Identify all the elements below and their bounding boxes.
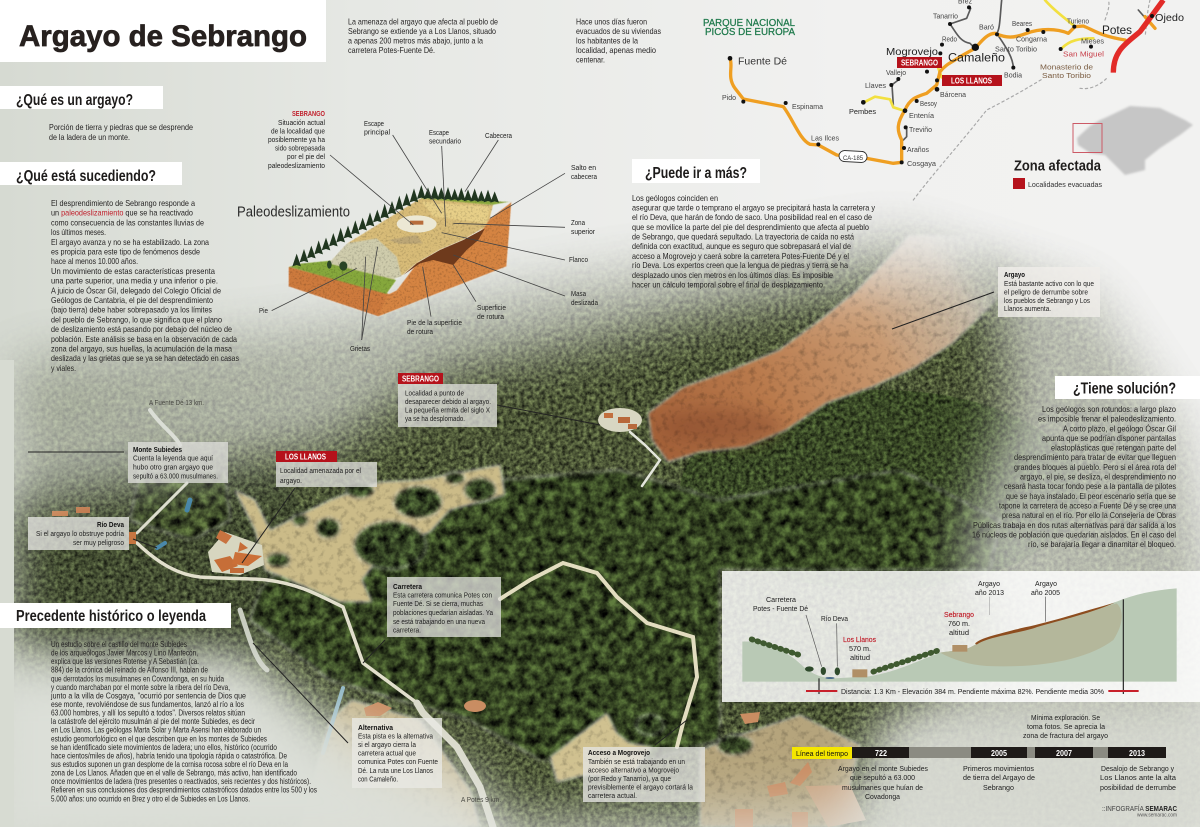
map: place names: Espinama: [792, 102, 824, 111]
panel: terrain profile: Argayo: [1035, 579, 1057, 588]
text: is there a solution: Públicas trabaja en dos rutas alternativas para dar salida a los: [973, 520, 1176, 530]
map: place names: Besoy: [920, 99, 937, 108]
map: place names: Mogrovejo: [886, 46, 938, 58]
text: definition of argayo: Porción de tierra y piedras que se desprende: [49, 122, 193, 132]
map: place names: Congarna: [1016, 34, 1048, 44]
text: historical precedent: se han identificado siete movimientos de ladera; uno ellos, histórico (ocurrido: [51, 743, 278, 752]
text: can it go further: río Deva. Los expertos creen que la lengua de piedras y tierra se ha: [632, 260, 848, 270]
map label: Los Llanos: [942, 75, 1002, 86]
panel: terrain profile: Carretera: [766, 595, 797, 604]
forest clumps on the meadows: [266, 472, 753, 755]
text: what is happening: es propicia para este tipo de fenómenos desde: [51, 246, 200, 256]
panel: terrain profile: año 2005: [1031, 588, 1060, 597]
panel: terrain profile: [722, 571, 1200, 702]
roads and tracks: [137, 410, 697, 827]
forest: distant canopy: [0, 207, 1200, 827]
map: place names: Entenía: [909, 111, 935, 120]
text: historical precedent: [50, 640, 317, 803]
intro text block 1: La amenaza del argayo que afecta al pueblo de: [348, 16, 498, 26]
intro text block 1: [348, 16, 498, 55]
diagram labels: Pie: [259, 306, 268, 315]
text: can it go further: definida con exactitud, aunque es seguro que sobrepasará el vial de: [632, 241, 851, 251]
text: can it go further: hacer un cálculo temporal sobre el final de desplazamiento.: [632, 280, 825, 290]
callout: Monte Subiedes: [28, 442, 228, 483]
callout: Argayo: el peligro de derrumbe sobre: [1004, 288, 1088, 296]
text: definition of argayo: de la ladera de un monte.: [49, 132, 130, 142]
text: what is happening: hace al menos 10.000 años.: [51, 256, 138, 266]
forest: foreground canopy: [130, 470, 1000, 760]
text: what is happening: deslizada y las grietas que se ya se han detectado en casas: [51, 353, 239, 363]
text: historical precedent: ese monte, revolviéndose de sus fundamentos, lanzó al río a los: [51, 700, 244, 709]
map: place names: Potes: [1102, 23, 1132, 37]
panel: terrain profile: altitud: [949, 628, 969, 637]
callout: Acceso a Mogrovejo: (por Redo y Tanarrio), ya que: [588, 774, 671, 783]
intro text block 1: Sebrango se extiende ya a Los Llanos, situado: [348, 26, 496, 36]
callout: Los Llanos: argayo.: [280, 476, 302, 485]
text: can it go further: asegurar que tarde o temprano el argayo se precipitará hasta la carretera y: [632, 202, 876, 212]
text: historical precedent: 5.000 años: uno ocurrido en Brez y otro el de Subiedes en Los Llanos.: [51, 794, 250, 803]
map: place names: Llaves: [865, 81, 886, 90]
map: place names: Pembes: [849, 107, 876, 116]
callout: Carretera: [363, 577, 501, 663]
text: what is happening: (bajo tierra) debe haber sobrepasado ya los límites: [51, 305, 212, 315]
map: place names: Tanarrio: [933, 12, 958, 20]
text: historical precedent: hace cientos/miles de años), habría tenido una tipología rápida o catastrófica. De: [51, 751, 287, 760]
map: place names: Camaleño: [948, 50, 1005, 64]
heading: ¿Qué está sucediendo?: [0, 162, 182, 185]
map: place names: Ojedo: [1155, 13, 1184, 24]
diagram labels: de rotura: [407, 327, 434, 336]
text: what is happening: Geólogos de Cantabria, el pie del desprendimiento: [51, 295, 213, 305]
text: historical precedent: la catástrofe del ejército musulmán al pie del monte Subiedes, es decir: [51, 717, 255, 726]
timeline: 722 note: Argayo en el monte Subiedes: [838, 764, 928, 773]
rupture surface: [403, 228, 485, 275]
callout: Sebrango: Localidad a punto de: [405, 388, 464, 398]
callout: Alternativa: Esta pista es la alternativa: [358, 732, 434, 740]
map: place names: Fuente Dé: [738, 56, 787, 68]
callout: Argayo: Está bastante activo con lo que: [1004, 279, 1094, 288]
text: historical precedent: Refieren en sus conclusiones dos desprendimientos catastróficos datados entre los 500 y los: [51, 786, 317, 795]
text: historical precedent: once movimientos de ladera (tres presentes o reactivados, seis recientes y dos históricos).: [51, 777, 311, 786]
text: what is happening: zona del argayo, sus huellas, la acumulación de la masa: [51, 344, 232, 354]
map: place names: [703, 0, 1184, 168]
diagram labels: [259, 109, 599, 353]
map: CA-185 road badge: [839, 150, 867, 163]
text: historical precedent: estudio geomorfológico en el que describen que en los montes de Subiedes: [51, 734, 267, 743]
map: place names: San Miguel: [1063, 50, 1104, 58]
intro text block 2: los habitantes de la: [576, 36, 638, 46]
text: can it go further: desplazado unos cien metros en los últimos días. Es imposible: [632, 270, 833, 280]
callout: Sebrango: desaparecer debido al argayo.: [405, 397, 491, 406]
intro text block 1: carretera Potes-Fuente Dé.: [348, 45, 435, 55]
callout: Acceso a Mogrovejo: También se está trabajando en un: [588, 757, 685, 766]
timeline: note above 2007: [1023, 713, 1108, 740]
text: historical precedent: Un estudio sobre el castillo del monte Subiedes: [51, 640, 187, 649]
callout: Acceso a Mogrovejo: Acceso a Mogrovejo: [588, 748, 650, 757]
timeline: 2005 note: [963, 764, 1035, 792]
soil side face: [378, 202, 512, 317]
callout: Sebrango: SEBRANGO: [402, 374, 439, 384]
timeline: bar: 2005: [991, 749, 1007, 758]
profile: houses: [852, 669, 867, 677]
timeline: 2005 note: Primeros movimientos: [963, 764, 1034, 773]
map label: Los Llanos: LOS LLANOS: [951, 76, 993, 86]
callout: Alternativa: si el argayo cierra la: [358, 740, 417, 749]
text: what is happening: del pueblo de Sebrango, lo que significa que el plano: [51, 314, 222, 324]
heading: Paleodeslizamiento: Paleodeslizamiento: [237, 204, 350, 220]
intro text block 1: a apenas 200 metros más abajo, junto a la: [348, 36, 483, 46]
text: can it go further: el río Deva, que harán de fondo de saco. Una posibilidad real en el caso de: [632, 212, 872, 222]
text: historical precedent: y cuando marchaban por el monte sobre la ribera del río Deva,: [51, 683, 230, 692]
text: what is happening: un paleodeslizamiento que se ha reactivado: [51, 208, 193, 218]
text: can it go further: de Sebrango, que quedará sepultado. La trayectoria de caída no está: [632, 232, 854, 242]
legend: zona afectada: [1013, 158, 1102, 189]
text: what is happening: de deslizamiento está pasando por debajo del núcleo de: [51, 324, 232, 334]
text: is there a solution: desprendimiento para tratar de evitar que lleguen: [1014, 452, 1176, 462]
map: place names: PARQUE NACIONAL: [703, 18, 795, 29]
text: can it go further: [632, 193, 876, 290]
text: historical precedent: junto a la villa de Cosgaya, "ocurrió por sentencia de Dios que: [50, 691, 246, 700]
diagram labels: posiblemente ya ha: [268, 135, 326, 144]
heading: ¿Qué es un argayo?: [0, 86, 163, 109]
text: is there a solution: cesará hasta tocar fondo pese a la pantalla de pilotes: [1004, 481, 1176, 491]
profile: hillside: [742, 588, 1177, 682]
intro text block 2: [576, 16, 661, 64]
callout: Argayo: Llanos aumenta.: [1004, 304, 1051, 313]
locator map: [703, 0, 1184, 200]
credit: www.semarac.com: [1137, 812, 1177, 818]
timeline: [792, 713, 1177, 801]
timeline: 2013 note: [1100, 764, 1177, 792]
panel: terrain profile: altitud: [850, 653, 870, 662]
callout: Carretera: Fuente Dé. Si se cierra, muchas: [393, 599, 483, 608]
diagram labels: secundario: [429, 136, 461, 146]
callout: Alternativa: Alternativa: [358, 723, 394, 732]
timeline: 2005 note: de tierra del Argayo de: [963, 773, 1035, 782]
callout: Carretera: poblaciones quedarían aisladas. Ya: [393, 608, 494, 617]
map: roads and boundaries: [728, 0, 1163, 200]
map: place names: Beares: [1012, 19, 1032, 28]
callout: Los Llanos: [242, 451, 377, 563]
map: place names: Vallejo: [886, 68, 906, 77]
diagram labels: por el pie del: [287, 152, 325, 161]
callout: Sebrango: La pequeña ermita del siglo X: [405, 406, 490, 414]
panel: terrain profile: año 2013: [975, 588, 1004, 597]
callout: Alternativa: comunica Potes con Fuente: [358, 757, 438, 766]
diagram labels: Escape: [429, 128, 449, 137]
text: is there a solution: es imposible frenar el paleodeslizamiento.: [1038, 414, 1176, 424]
panel: terrain profile: 760 m.: [948, 619, 970, 628]
timeline: bar: 2007: [1056, 749, 1072, 758]
landslide: [648, 235, 1027, 462]
callout: Alternativa: con Camaleño.: [358, 774, 398, 784]
callout: Sebrango: ya se ha desplomado.: [405, 414, 465, 423]
diagram labels: Flanco: [569, 255, 588, 264]
grass strip: [288, 260, 397, 294]
callout: Monte Subiedes: Cuenta la leyenda que aquí: [133, 454, 214, 462]
text: historical precedent: 63.000 hombres, y allí los sepultó a todos". Diversos relatos sitúan: [51, 709, 245, 718]
map: CA-185 road badge: CA-185: [843, 155, 863, 162]
map: place names: Santo Toribio: [1042, 71, 1091, 80]
diagram labels: Zona: [571, 218, 586, 227]
title: [0, 0, 326, 62]
diagram labels: paleodeslizamiento: [268, 161, 325, 170]
map: place names: PICOS DE EUROPA: [705, 27, 795, 38]
callout: Río Deva: ser muy peligroso: [73, 538, 124, 547]
timeline: 2013 note: posibilidad de derrumbe: [1100, 783, 1176, 792]
text: what is happening: una parte superior, una media y una inferior o pie.: [51, 276, 218, 286]
diagram labels: Pie de la superficie: [407, 318, 462, 327]
text: historical precedent: sus estudios suponen un gran desplome de la cornisa rocosa sobre el río Deva en la: [51, 760, 289, 769]
landslide dark lower shading: [662, 408, 782, 444]
map: place names: Araños: [907, 145, 929, 154]
heading: ¿Qué está sucediendo?: ¿Qué está sucediendo?: [16, 168, 156, 185]
diagram labels: Cabecera: [485, 131, 513, 140]
text: is there a solution: argayo, el pie, se desliza, el desprendimiento no: [1020, 472, 1176, 482]
callout: Argayo: [892, 267, 1100, 329]
timeline: 722 note: [838, 764, 928, 801]
text: what is happening: El desprendimiento de Sebrango responde a: [51, 198, 195, 208]
timeline: bar: 2013: [1129, 749, 1145, 758]
timeline: 722 note: que sepultó a 63.000: [850, 773, 915, 782]
diagram labels: cabecera: [571, 172, 598, 181]
timeline: note above 2007: zona de fractura del argayo: [1023, 731, 1108, 740]
text: is there a solution: que se haya instalado. El peor escenario sería que se: [1006, 491, 1176, 501]
text: historical precedent: de los arqueólogos Javier Marcos y Lino Mantecón,: [51, 649, 198, 658]
block diagram: paleodeslizamiento: [272, 135, 565, 340]
callout: Argayo: Argayo: [1004, 270, 1025, 279]
text: is there a solution: A corto plazo, el geólogo Óscar Gil: [1063, 423, 1176, 433]
leader lines: [272, 135, 565, 340]
profile: trees: [752, 639, 942, 672]
text: is there a solution: Los geólogos son rotundos: a largo plazo: [1042, 404, 1176, 414]
credit: [1102, 804, 1177, 818]
text: is there a solution: 16 núcleos de población que quedarían aislados. En el caso del: [972, 530, 1176, 540]
heading: ¿Puede ir a más?: [632, 159, 760, 183]
text: is there a solution: río, se barajaría llegar a dinamitar el bloqueo.: [1028, 539, 1176, 549]
text: what is happening: población. Este análisis se basa en la observación de cada: [51, 334, 237, 344]
panel: terrain profile: Sebrango: [944, 610, 974, 619]
callout: Carretera: Carretera: [393, 582, 423, 591]
callout: Alternativa: Dé. La ruta une Los Llanos: [358, 766, 433, 775]
tree line: [292, 185, 499, 266]
timeline: note above 2007: toma fotos. Se aprecia la: [1027, 722, 1106, 731]
callout: Alternativa: [253, 643, 442, 788]
text: what is happening: A juicio de Óscar Gil, delegado del Colegio Oficial de: [51, 285, 221, 295]
timeline: bar: [792, 747, 1166, 759]
intro text block 2: Hace unos días fueron: [576, 16, 647, 26]
map: place names: Bárcena: [940, 90, 967, 99]
diagram labels: Superficie: [477, 303, 506, 312]
diagram labels: Salto en: [571, 163, 596, 172]
diagram labels: de rotura: [477, 312, 505, 321]
legend: zona afectada: Zona afectada: [1014, 158, 1102, 174]
title: Argayo de Sebrango: [19, 20, 307, 53]
intro text block 2: evacuados de su viviendas: [576, 26, 661, 36]
panel: terrain profile: Los Llanos: [843, 635, 876, 644]
profile: leaders and scale: [806, 597, 1046, 667]
panel: terrain profile: Argayo: [978, 579, 1000, 588]
aerial illustration: forest valley and landslide: [0, 207, 1200, 827]
heading: ¿Qué es un argayo?: ¿Qué es un argayo?: [16, 92, 133, 109]
map: place names: Turieno: [1067, 16, 1089, 26]
map: place names: Las Ilces: [811, 134, 839, 142]
callout: Acceso a Mogrovejo: previsiblemente el argayo cortará la: [588, 782, 694, 792]
callout: Monte Subiedes: Monte Subiedes: [133, 445, 182, 454]
text: historical precedent: que derrotados los musulmanes en Covandonga, en su huida: [51, 674, 225, 683]
callout: Río Deva: Río Deva: [97, 520, 125, 529]
map: place names: Bodia: [1004, 70, 1023, 80]
timeline: bar: 722: [875, 749, 887, 758]
text: historical precedent: en Los Llanos. Las geólogas Marta Solar y Marta Asensi han elaborado un: [51, 726, 261, 735]
text: is there a solution: presa natural en el río. Por ello la Consejería de Obras: [1002, 510, 1176, 520]
diagram labels: Escape: [364, 119, 384, 128]
village: Los Llanos: [52, 507, 264, 575]
inset: Cantabria locator: [1073, 106, 1193, 175]
text: can it go further: acceso a Mogrovejo y caerá sobre la carretera Potes-Fuente Dé y el: [632, 251, 849, 261]
label: A Potes: A Potes 9 km.: [461, 795, 501, 804]
text: what is happening: El argayo avanza y no se ha estabilizado. La zona: [51, 237, 209, 247]
callout: Alternativa: carretera actual que: [358, 748, 416, 758]
diagram labels: Situación actual: [278, 118, 325, 127]
callout: Argayo: los pueblos de Sebrango y Los: [1004, 296, 1090, 305]
diagram labels: de la localidad que: [271, 126, 325, 136]
timeline: 722 note: musulmanes que huían de: [842, 783, 923, 792]
text: what is happening: Un movimiento de estas características presenta: [51, 266, 215, 276]
text: historical precedent: 884) de la crónica del reinado de Alfonso III, hablan de: [51, 666, 208, 675]
map: place names: Baró: [979, 22, 994, 32]
text: historical precedent: explica que las versiones Rotense y A Sebastián (ca.: [51, 657, 199, 666]
heading: Precedente histórico o leyenda: Precedente histórico o leyenda: [16, 608, 206, 625]
text: is there a solution: apunta que se podrían disponer pantallas: [1042, 433, 1176, 443]
text: definition of argayo: [49, 122, 193, 142]
intro text block 2: centenar.: [576, 54, 605, 64]
diagram labels: superior: [571, 227, 595, 236]
map: place names: Mieses: [1081, 36, 1104, 46]
timeline: 2013 note: Los Llanos ante la alta: [1100, 773, 1177, 782]
small white hamlet: [397, 215, 437, 233]
diagram labels: SEBRANGO: [292, 109, 325, 118]
diagram labels: principal: [364, 128, 390, 136]
callout: Acceso a Mogrovejo: [583, 720, 705, 802]
village: Sebrango: [598, 408, 642, 432]
callout: Carretera: Esta carretera comunica Potes con: [393, 590, 492, 600]
diagram labels: deslizada: [571, 298, 599, 307]
text: can it go further: que se movilice la parte del pie del desprendimiento que afecta al pueblo: [632, 222, 869, 232]
text: is there a solution: [972, 404, 1176, 549]
meadows: [235, 465, 860, 827]
credit: ::INFOGRAFÍA SEMARAC: [1102, 804, 1177, 813]
text: is there a solution: elastoplásticas que retengan parte del: [1051, 443, 1176, 453]
text: what is happening: los últimos meses.: [51, 227, 106, 237]
callout: Los Llanos: Localidad amenazada por el: [280, 466, 361, 475]
text: is there a solution: grandes bloques al pueblo. Pero si el área rota del: [1014, 462, 1176, 472]
diagram labels: sido sobrepasada: [275, 144, 326, 152]
map: place names: Monasterio de: [1040, 62, 1093, 72]
heading: ¿Puede ir a más?: ¿Puede ir a más?: [645, 165, 747, 182]
diagram labels: Masa: [571, 289, 587, 298]
timeline: note above 2007: Mínima exploración. Se: [1031, 713, 1100, 722]
panel: terrain profile: 570 m.: [849, 644, 871, 653]
profile: argayo surface: [975, 603, 1115, 645]
heading: Precedente histórico o leyenda: [0, 603, 231, 628]
callout: Río Deva: Si el argayo lo obstruye podría: [36, 529, 125, 538]
callout: Acceso a Mogrovejo: acceso alternativo a Mogrovejo: [588, 766, 679, 774]
map label: Sebrango: [897, 57, 942, 68]
text: historical precedent: zona de Los Llanos. Añaden que en el valle de Sebrango, más activo, han identificado: [51, 769, 298, 778]
map: place names: Treviño: [909, 125, 932, 134]
slide surface: [328, 198, 493, 279]
map: place names: Cosgaya: [907, 159, 937, 168]
timeline: 2005 note: Sebrango: [983, 783, 1014, 792]
map: place names: Santo Toribio: [995, 44, 1037, 54]
timeline: 2013 note: Desalojo de Sebrango y: [1101, 764, 1174, 773]
text: can it go further: Los geólogos coinciden en: [632, 193, 718, 203]
label: A Fuente Dé: A Fuente Dé 13 km.: [149, 398, 204, 407]
village: lower hamlets: [364, 700, 866, 827]
panel: terrain profile: Potes - Fuente Dé: [753, 604, 808, 613]
panel: terrain profile: Río Deva: [821, 614, 849, 623]
map: place names: Pido: [722, 93, 736, 102]
heading: ¿Tiene solución?: [1055, 376, 1200, 399]
intro text block 2: localidad, apenas medio: [576, 45, 656, 55]
callout: Carretera: se está trabajando en una nueva: [393, 617, 486, 626]
fog: lower left and bottom: [0, 655, 1200, 827]
callout: Río Deva: [28, 517, 157, 550]
panel: terrain profile: Distancia: 1.3 Km - Elevación 384 m. Pendiente máxima 82%. Pendiente media 30%: [841, 687, 1104, 696]
diagram labels: Grietas: [350, 344, 370, 353]
text: what is happening: y viales.: [51, 363, 76, 373]
timeline: bar: Línea del tiempo: [796, 749, 848, 758]
text: what is happening: [51, 198, 239, 373]
text: what is happening: como consecuencia de las constantes lluvias de: [51, 217, 204, 227]
callout: Sebrango: [398, 373, 600, 427]
left margin strip: [0, 360, 14, 827]
map: place names: Redo: [942, 34, 957, 44]
callout: Monte Subiedes: sepultó a 63.000 musulmanes.: [133, 472, 218, 480]
profile: slide mass: [940, 603, 1122, 666]
soil front face: [288, 267, 390, 317]
callout: Los Llanos: LOS LLANOS: [285, 452, 327, 462]
map label: Sebrango: SEBRANGO: [901, 58, 938, 68]
callout: Acceso a Mogrovejo: carretera actual.: [588, 791, 637, 800]
callout: Carretera: carretera.: [393, 626, 421, 634]
callout: Monte Subiedes: hubo otro gran argayo que: [133, 462, 213, 472]
timeline: 722 note: Covadonga: [865, 792, 901, 801]
legend: zona afectada: Localidades evacuadas: [1028, 180, 1102, 189]
